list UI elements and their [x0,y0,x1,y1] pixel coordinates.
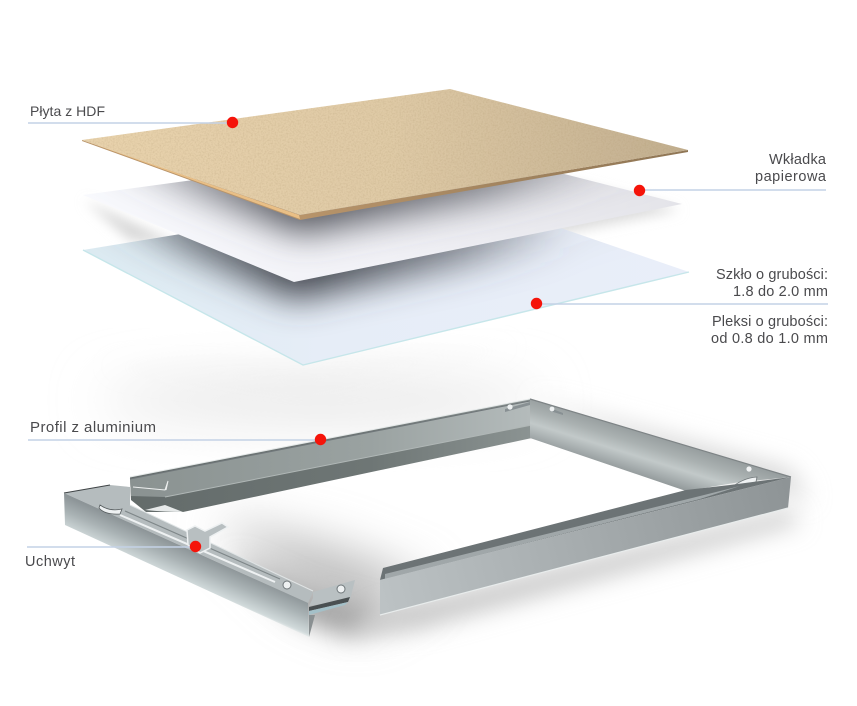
glass pane [82,228,689,366]
label: Płyta z HDF: Płyta z HDF [30,103,105,119]
label: Wkładka papierowa [634,152,827,196]
label: Wkładka papierowa: papierowa [755,169,827,185]
aluminium frame [64,399,791,637]
back rail [130,399,532,512]
label: Szkło and Pleksi thickness: 1.8 do 2.0 mm [733,284,828,300]
HDF board [82,89,688,220]
front rail [380,477,791,615]
label: Szkło and Pleksi thickness: od 0.8 do 1.0 mm [711,331,828,347]
label: Płyta z HDF [28,103,238,128]
label: Uchwyt: Uchwyt [25,554,75,570]
right rail fixings [505,402,757,490]
label: Szkło and Pleksi thickness: Szkło o grubości: [716,267,828,283]
label: Profil z aluminium: Profil z aluminium [30,419,156,436]
right rail [530,399,791,491]
exploded diagram of a frame [26,89,828,654]
label: Uchwyt [25,541,201,570]
label: Wkładka papierowa: Wkładka [769,152,827,168]
soft background shadows [84,180,810,636]
label: Szkło and Pleksi thickness: Pleksi o grubości: [712,314,828,330]
paper insert [96,172,682,282]
label: Szkło and Pleksi thickness [531,267,828,347]
left rail with bracket [64,485,355,637]
label: Profil z aluminium [28,419,326,445]
